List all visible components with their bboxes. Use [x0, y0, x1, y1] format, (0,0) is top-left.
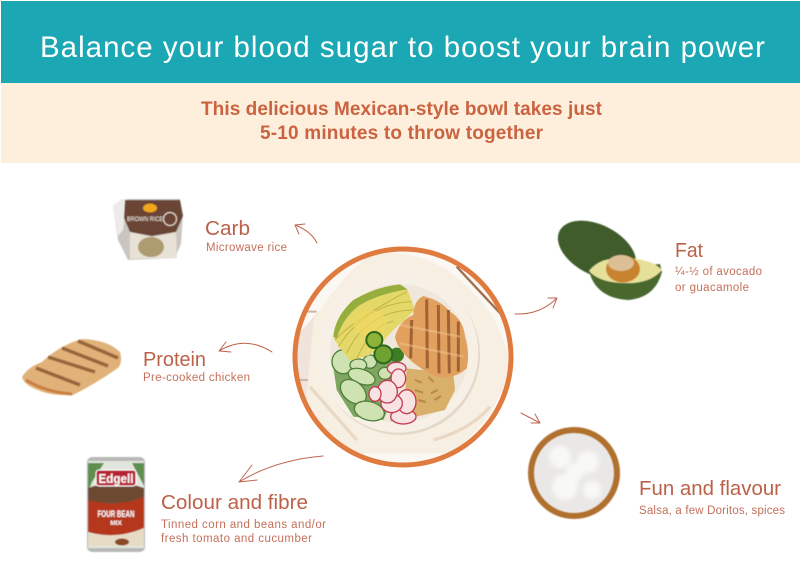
- label: fun and flavour: Salsa, a few Doritos, spices: [639, 505, 785, 517]
- central bowl photo: [290, 240, 520, 470]
- subtitle text: 5-10 minutes to throw together: [260, 123, 544, 144]
- cucumbers: [334, 360, 394, 420]
- icon: avocado: [548, 209, 662, 300]
- label: colour and fibre: [161, 492, 326, 545]
- label: protein: [143, 349, 250, 384]
- icon: four bean mix can: MIX: [110, 520, 122, 527]
- label: carb: [205, 218, 287, 254]
- label: fat: Fat: [675, 240, 703, 262]
- arrow: to colour and fibre: [239, 456, 323, 482]
- title: Balance your blood sugar to boost your brain power: [40, 31, 765, 64]
- can logo: [96, 470, 136, 486]
- arrow: to fat: [515, 298, 557, 314]
- subtitle band: [1, 83, 800, 163]
- chicken: [395, 296, 468, 377]
- label: colour and fibre: Colour and fibre: [161, 492, 308, 514]
- icon: bowl of salt and spices: [528, 427, 620, 519]
- radish: [369, 362, 416, 424]
- bowl: [334, 308, 480, 435]
- label: fat: [675, 240, 762, 294]
- label: fun and flavour: [639, 478, 785, 517]
- subtitle text: This delicious Mexican-style bowl takes just: [201, 99, 603, 120]
- arrow: to protein: [219, 342, 272, 352]
- icon: four bean mix can: FOUR BEAN: [98, 509, 134, 519]
- icon: four bean mix can: [87, 457, 145, 552]
- arrow: to fun and flavour: [521, 413, 540, 423]
- grains: [390, 368, 455, 422]
- label: colour and fibre: Tinned corn and beans and/or: [161, 519, 326, 531]
- label: carb: Carb: [205, 218, 250, 240]
- icon: four bean mix can: Edgell: [98, 472, 134, 486]
- label: fat: ¼-½ of avocado: [675, 266, 762, 278]
- label: fat: or guacamole: [675, 282, 749, 294]
- label: protein: Pre-cooked chicken: [143, 372, 250, 384]
- jalapeno: [392, 348, 404, 362]
- label: colour and fibre: fresh tomato and cucumber: [161, 533, 312, 545]
- label: carb: Microwave rice: [206, 242, 287, 254]
- label: fun and flavour: Fun and flavour: [639, 478, 781, 500]
- avocado: [333, 284, 415, 361]
- icon: grilled chicken breast: [22, 339, 121, 395]
- subtitle text: [201, 99, 603, 144]
- header banner: [1, 1, 800, 83]
- icon: microwave rice pack: [113, 199, 183, 260]
- label: protein: Protein: [143, 349, 206, 371]
- pack text: BROWN RICE: [127, 216, 164, 223]
- arrow: to carb: [295, 224, 317, 243]
